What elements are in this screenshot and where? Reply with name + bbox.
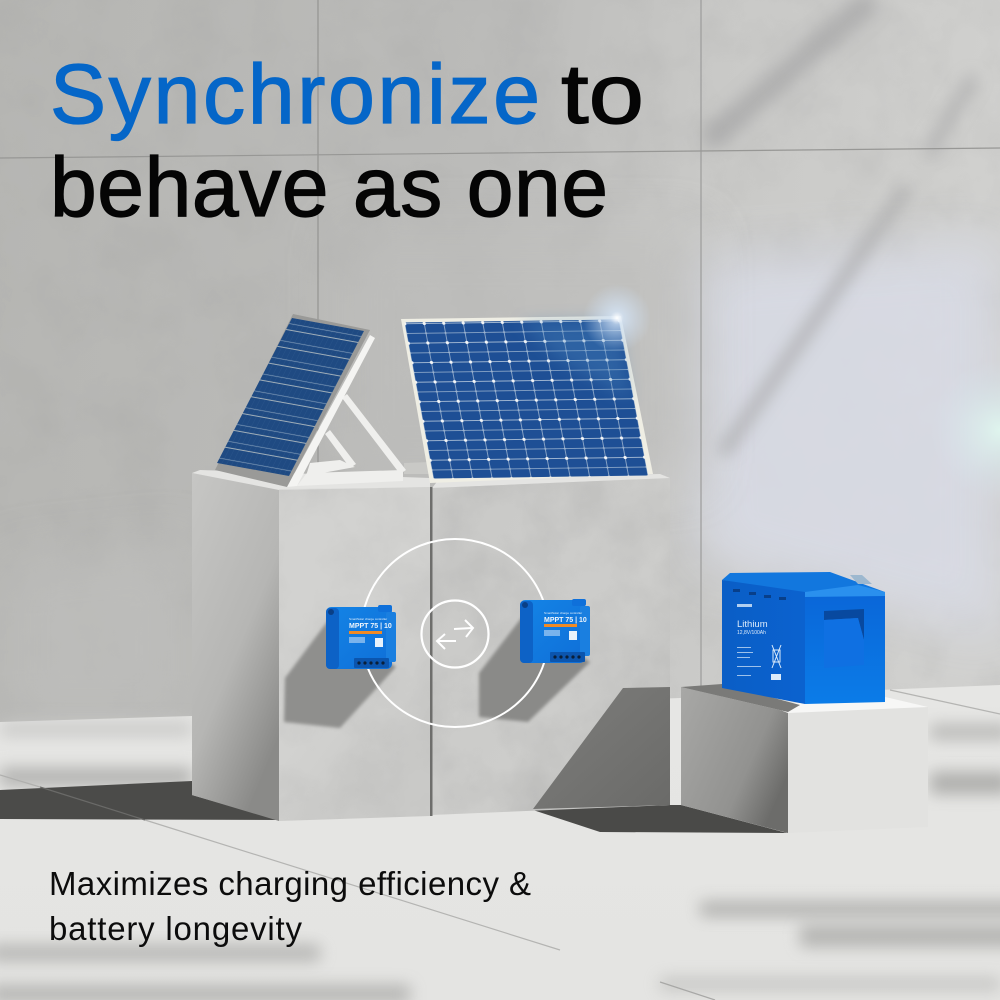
subtitle: battery longevity [49,910,302,947]
charge controller left: SmartSolar charge controller [349,617,387,621]
floor shadow bands [0,725,1000,1000]
title [50,47,644,234]
title: behave as one [50,140,608,234]
left plinth [192,470,430,821]
solar panel: front right [401,284,653,483]
charge controller right: MPPT 75 | 10 [544,617,587,624]
battery label: 12,8V/100Ah [737,630,766,636]
charge controller left [326,605,396,669]
concrete wall [0,0,1000,730]
controller shadow left [284,618,396,728]
subtitle: Maximizes charging efficiency & [49,865,531,902]
charge controller right: SmartSolar charge controller [544,611,582,615]
sync ring [361,539,549,727]
charge controller left: MPPT 75 | 10 [349,623,392,630]
battery handle recess [824,609,864,640]
sync icon: bidirectional arrows [422,600,488,668]
floor [0,685,1000,1000]
subtitle [49,865,531,947]
centre plinth floor shadow [533,805,787,833]
support strut frame [297,394,430,486]
title: Synchronize [50,47,540,141]
lithium battery [722,572,885,704]
wall shadow streaks [715,5,972,450]
plinth cast shadow [533,687,670,809]
battery label: Lithium [737,619,768,630]
solar panel: angled left [215,314,430,487]
battery plinth [681,684,928,833]
controller shadow right [479,617,590,722]
battery label [737,604,781,680]
charge controller right [520,599,590,663]
battery top vents [733,589,786,600]
left plinth floor shadow [0,781,279,820]
lens flare [583,284,651,352]
title: to [561,47,644,141]
right plinth [430,474,670,816]
